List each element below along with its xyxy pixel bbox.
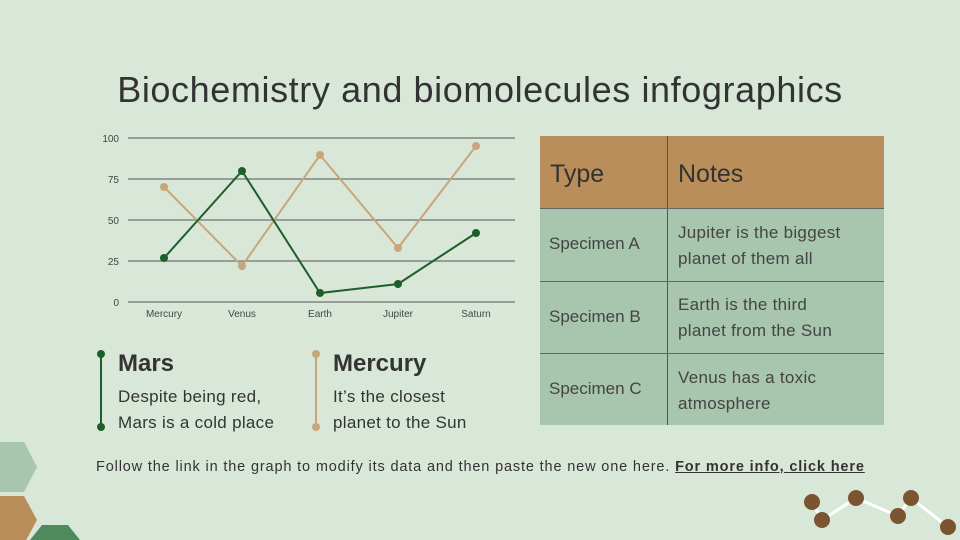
line chart: Saturn [461, 309, 491, 320]
table: Notes [678, 160, 743, 188]
table: Type [550, 160, 604, 188]
line chart: Venus [228, 309, 256, 320]
title: Biochemistry and biomolecules infographics [117, 69, 843, 110]
table: Earth is the third planet from the Sun [678, 295, 832, 340]
line chart: 75 [108, 175, 119, 186]
legend: Mars: Despite being red, Mars is a cold place [118, 387, 274, 432]
line chart: 0 [113, 298, 119, 309]
legend: Mars: Mars [118, 350, 174, 377]
line chart [102, 134, 515, 320]
table: Jupiter is the biggest planet of them all [678, 223, 841, 268]
line chart: Mercury [146, 309, 182, 320]
legend: Mercury: Mercury [333, 350, 426, 377]
line chart: 50 [108, 216, 119, 227]
decorative hexagons [0, 442, 80, 540]
molecule icon [804, 490, 956, 535]
legend: Mercury [312, 350, 467, 432]
line chart: Jupiter [383, 309, 414, 320]
line chart: 100 [102, 134, 119, 145]
legend: Mars [97, 350, 274, 432]
table [540, 136, 884, 425]
footer text: Follow the link in the graph to modify its data and then paste the new one here. For more info, click here [96, 459, 865, 475]
table: Specimen C [549, 379, 642, 398]
line chart: 25 [108, 257, 119, 268]
legend: Mercury: It’s the closest planet to the Sun [333, 387, 467, 432]
line chart: Earth [308, 309, 332, 320]
table: Specimen A [549, 234, 640, 253]
table: Specimen B [549, 307, 641, 326]
table: Venus has a toxic atmosphere [678, 368, 816, 413]
